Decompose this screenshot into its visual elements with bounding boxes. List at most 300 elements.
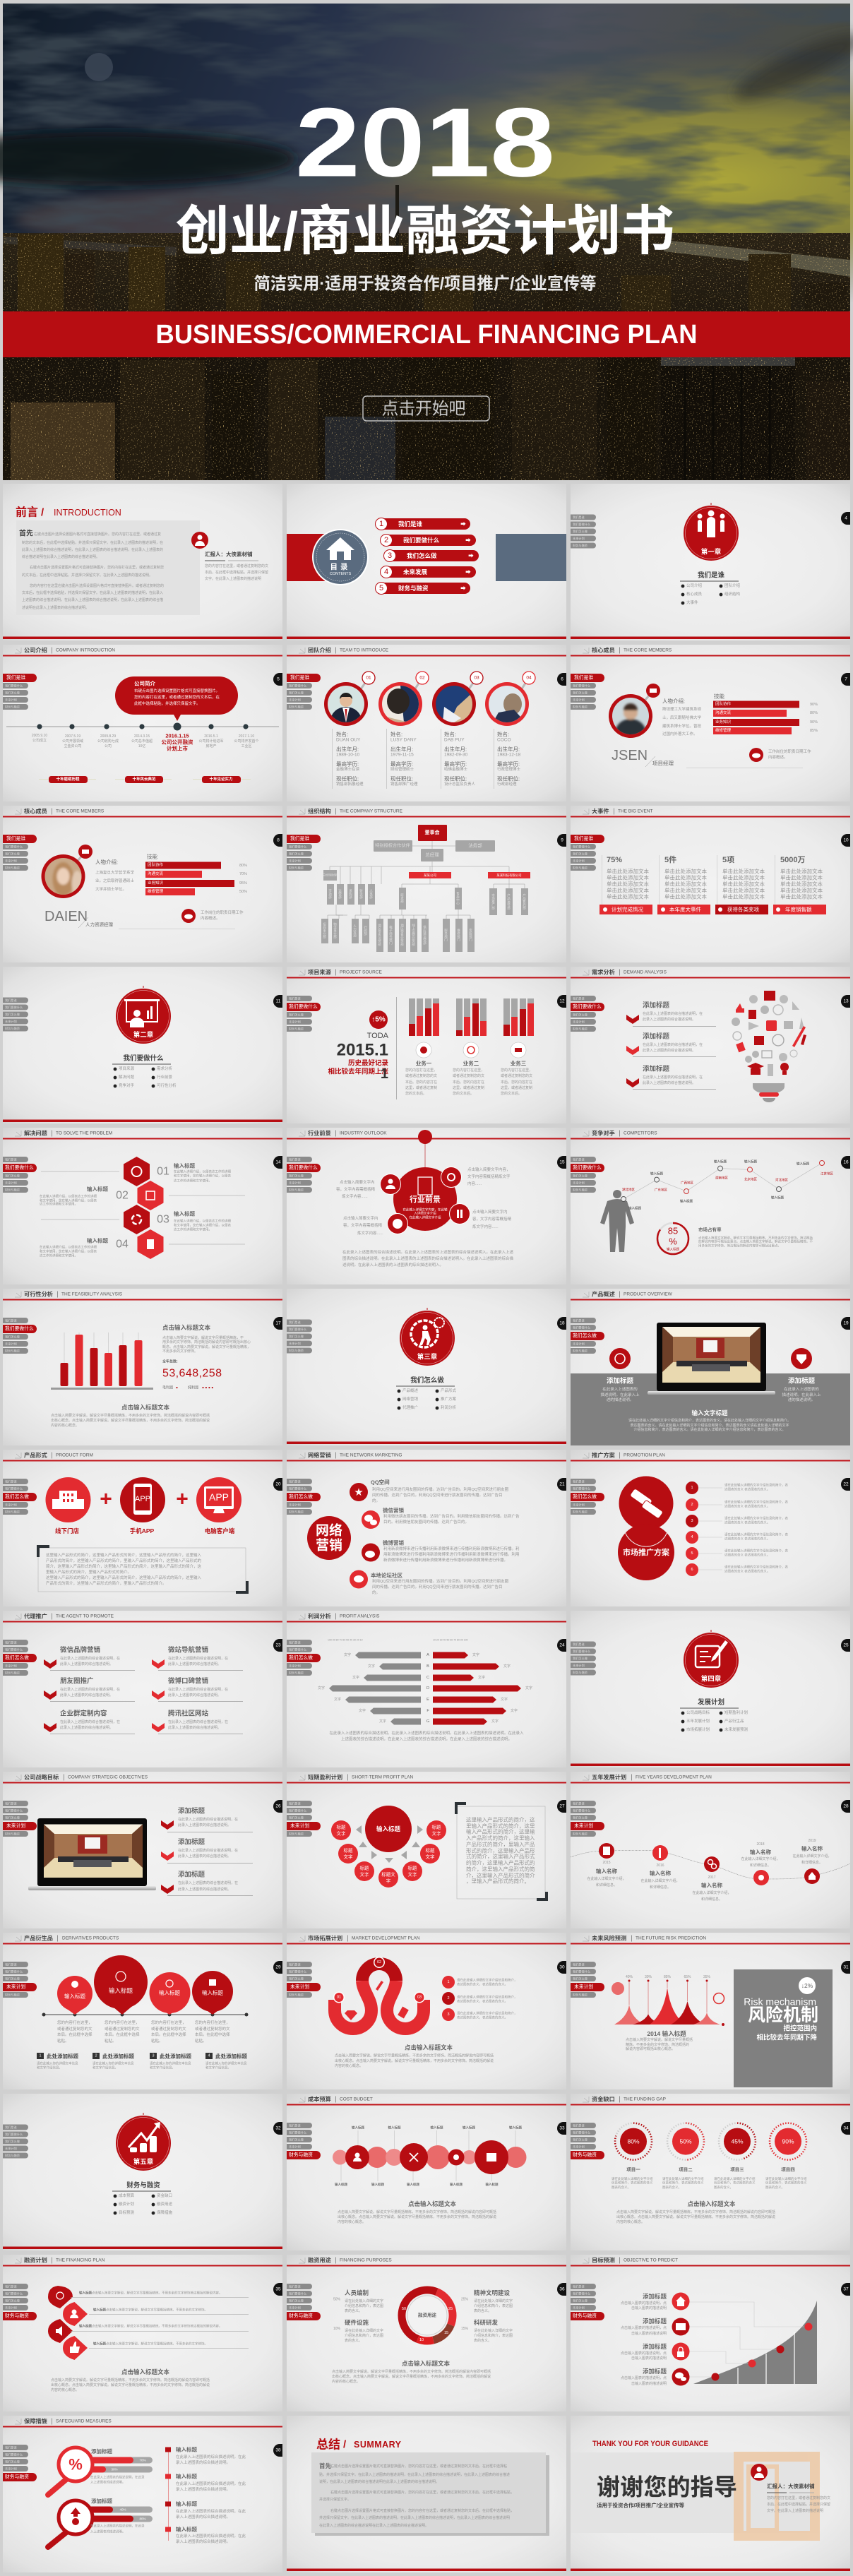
- hexagon step 04: 达工作的详细和文字使用。: [40, 1253, 78, 1258]
- slide: cost budget: [281, 2094, 566, 2250]
- profile column 01: 金融博士在读: [336, 766, 360, 772]
- sidebar: [565, 674, 604, 710]
- header: THE CORE MEMBERS: [624, 648, 672, 652]
- chart summary: 用多余的文字修饰。简洁概括的解说内容即可概括出核心: [162, 1340, 251, 1344]
- numbered list: 1: [691, 1486, 693, 1490]
- chapter title and items: 融资计划: [119, 2201, 134, 2207]
- diverging bar chart: 文字: [511, 1708, 518, 1713]
- chapter badge: [400, 1308, 455, 1366]
- numbered notes: 表达图表的含义，表达图表的含义。: [457, 1998, 508, 2004]
- portrait 03: [432, 672, 483, 726]
- portrait 04: 04: [526, 675, 532, 681]
- chapter badge: 第一章: [701, 548, 722, 556]
- QQ zone: 的。: [372, 1498, 380, 1503]
- header: FIVE YEARS DEVELOPMENT PLAN: [636, 1775, 712, 1779]
- callout texts: 内容......: [467, 1181, 482, 1186]
- slide: product form: [0, 1450, 282, 1606]
- timeline: 公司: [105, 744, 112, 749]
- product texts: 粘贴。: [57, 2038, 69, 2044]
- chapter title and items: 解决问题: [119, 1074, 135, 1080]
- header: [3, 808, 282, 818]
- header: 项目来源: [308, 969, 332, 976]
- header: TO SOLVE THE PROBLEM: [56, 1131, 112, 1135]
- diverging bar chart: 文字: [472, 1652, 479, 1657]
- sidebar: 未来计划: [289, 698, 301, 702]
- slide: five-year plan: [565, 1772, 850, 1928]
- profile column 04: 1983-12-18: [497, 753, 521, 757]
- item: friends circle: 此录入上述图表的综合描述说明。: [60, 1693, 113, 1698]
- chapter badge: [116, 986, 171, 1044]
- sidebar: [565, 1318, 604, 1354]
- contents list: ➡: [460, 585, 466, 592]
- gauge 80%: 请在此处输入详细的文字介绍: [612, 2176, 653, 2181]
- desktop client: [196, 1477, 241, 1534]
- peak chart: 35%: [703, 1975, 711, 1979]
- milestone buttons: [39, 776, 251, 783]
- header: [3, 1774, 282, 1784]
- event column 1: [600, 855, 652, 914]
- item: enterprise group: 企业群定制内容: [60, 1709, 107, 1717]
- reporter block: [751, 2464, 830, 2513]
- bracket text box: 入产品形式的简介，这里输入: [466, 1835, 535, 1842]
- sidebar: 我们怎么做: [573, 2137, 588, 2142]
- page number: 28: [843, 1803, 849, 1809]
- numbered subheads: 请在此输入你的详细文本信息: [150, 2061, 191, 2066]
- profile column 03: 最高学历:: [444, 760, 467, 767]
- measures list: 输入标题: [176, 2525, 197, 2532]
- market line: 湖南地区: [715, 1175, 728, 1181]
- left legend: 表的含义。: [345, 2338, 362, 2343]
- timeline: 公司成立: [32, 738, 47, 743]
- text panel: foreword: 此录入上述图表的综合描述说明，在此录入上述图表的综合描述说明，在此录入上述图表的: [22, 547, 163, 552]
- page number: 35: [275, 2286, 281, 2292]
- page number: [557, 673, 566, 686]
- sidebar: 财务与融资: [573, 1349, 587, 1353]
- sidebar: 我们怎么做: [573, 1656, 588, 1661]
- hero start button: [363, 396, 489, 421]
- central circle with satellites: 入详细文字介绍: [414, 1210, 436, 1216]
- chapter title and items: 我们要做什么: [123, 1054, 164, 1062]
- description: [51, 2368, 210, 2392]
- org chart: 服务部门: [444, 929, 448, 942]
- sidebar: 我们怎么做: [289, 1815, 304, 1820]
- profile column 02: 财经管理硕士: [390, 766, 414, 772]
- magnifier 1 with bars: 添加标题: [91, 2447, 112, 2455]
- business three: 您的内容打在这里，: [501, 1068, 532, 1073]
- header: THE NETWORK MARKETING: [340, 1453, 402, 1457]
- local forum: 利用QQ空间来进行用友圈间的传播。达到广告目的。利用QQ空间来进行朋友圈: [372, 1578, 509, 1584]
- sidebar: 我们是谁: [573, 1157, 585, 1162]
- description: 在此录入上述图表的综合描述说明。在此录入上述图表的综合描述说明。在此录入上述图表的描述说明。在此录入: [329, 1730, 524, 1736]
- profile column 04: 行政部经理: [497, 781, 517, 787]
- measures list: 录入上述图表的综合描述说明。: [176, 2539, 230, 2544]
- event column 1: 单击此处添加文本: [607, 887, 649, 894]
- sidebar: 财务与融资: [289, 2151, 313, 2158]
- header: 公司介绍: [24, 647, 47, 654]
- slide: financing plan: [0, 2255, 282, 2411]
- event column 2: 单击此处添加文本: [664, 880, 707, 887]
- gauge 45%: 图表的含义。: [714, 2185, 733, 2190]
- target 2: 点击输入图表的描述说明，点: [621, 2325, 667, 2330]
- item: friends circle: [44, 1676, 135, 1702]
- magnifier 1 with bars: 在此录入上述图表的描述说明，在此录: [90, 2474, 145, 2480]
- profile column 04: 出生年月:: [497, 746, 520, 753]
- header: COMPANY INTRODUCTION: [56, 648, 115, 652]
- page number: 19: [843, 1320, 849, 1326]
- hexagon step 01: 01: [157, 1165, 169, 1178]
- chart caption: 精炼。不用多余的文字修饰。简洁概括的: [626, 2042, 689, 2047]
- sidebar: 我们怎么做: [289, 2298, 304, 2303]
- product texts: 您的内容打在这里，: [105, 2020, 140, 2025]
- sidebar: 未来计划: [6, 1983, 25, 1990]
- sidebar: 我们是谁: [573, 2284, 585, 2289]
- product description box: 里输入产品形式的简介，里输入产品形式的简介。: [46, 1569, 131, 1575]
- record statement: 相比较去年同期上涨: [328, 1068, 388, 1076]
- magnifier 1 with bars: %: [68, 2456, 83, 2473]
- org chart: 产品运营部: [507, 893, 511, 911]
- plan item 2: 点击输入简要文字解说。解说文字尽量概括精炼。不用多余的文字修饰。: [106, 2308, 208, 2312]
- diverging bar chart: 文字: [501, 1697, 508, 1702]
- plan item 4: [63, 2336, 249, 2360]
- page number: [273, 1800, 282, 1813]
- target 4: 添加标题: [643, 2368, 667, 2375]
- bar chart group 2: [456, 998, 487, 1036]
- knot diagram: [335, 1964, 424, 2029]
- timeline: 公司将开发首个: [234, 739, 259, 744]
- thanks headline: 谢谢您的指导: [597, 2474, 737, 2500]
- page number: [557, 1639, 566, 1652]
- event column 4: 单击此处添加文本: [780, 887, 823, 894]
- description: 图表的综合描述说明。在此录入上述图表的上述图表的综合描述说明入。在此录入上述图表的综合描: [342, 1256, 514, 1261]
- item: WeChat guide: 微站导航营销: [168, 1645, 209, 1654]
- donut chart: 融资用途: [418, 2312, 436, 2318]
- radial diagram: 输入标题: [376, 1825, 400, 1832]
- event column 2: 单击此处添加文本: [664, 887, 707, 894]
- sidebar: 我们是谁: [290, 835, 309, 842]
- event column 4: 5000万: [780, 855, 805, 864]
- org chart: 地区零售业务部: [400, 923, 404, 947]
- sidebar: 我们是谁: [5, 2284, 17, 2289]
- reporter block: 文字。在此录入上述图表的描述说明: [205, 576, 261, 581]
- profile column 04: 姓名:: [497, 730, 509, 737]
- sidebar: 我们怎么做: [5, 2139, 20, 2144]
- chart summary: 纯利润: [188, 1385, 198, 1390]
- callout texts: [336, 1167, 512, 1236]
- text panel: foreword: 上述图表的综合描述说明，在此录入上述图表的综合描述说明，在此录入上述图表的综合描: [22, 597, 163, 602]
- gauge 45%: 45%: [731, 2138, 744, 2145]
- milestone buttons: 十年磨砺历程: [56, 776, 80, 782]
- slide: solving the problem: [0, 1128, 282, 1284]
- header: THE FINANCING PLAN: [56, 2258, 105, 2262]
- slide: summary: [287, 2416, 566, 2572]
- description: 点击输入标题文本: [687, 2200, 736, 2207]
- sidebar: 未来计划: [5, 1181, 17, 1185]
- radial diagram: 标题: [343, 1847, 353, 1853]
- sidebar: [0, 1640, 37, 1676]
- left feature: 描述说明。在此录入上: [600, 1392, 640, 1397]
- bracket text box: 的简介，这里输入产品形式的: [466, 1859, 535, 1866]
- timeline: 公司开展领域: [62, 739, 83, 744]
- numbered list: 6: [691, 1568, 693, 1572]
- sidebar: 财务与融资: [289, 705, 304, 709]
- product texts: 或者通过复制您的文: [105, 2026, 140, 2032]
- item: WeChat brand: 在此录入上述图表的综合描述说明，在: [60, 1656, 120, 1661]
- sidebar: 我们要做什么: [289, 845, 306, 849]
- sidebar: 未来计划: [6, 1822, 25, 1829]
- profile column 02: [387, 729, 418, 789]
- chapter badge: [684, 503, 739, 561]
- sidebar: 财务与融资: [289, 2312, 313, 2319]
- org chart: 线上运营业务部: [412, 923, 415, 947]
- sidebar: [281, 1801, 321, 1837]
- sidebar: 未来计划: [289, 859, 301, 863]
- item: enterprise group: 在此录入上述图表的综合描述说明，在: [60, 1719, 120, 1724]
- radial diagram: 文字: [336, 1830, 346, 1836]
- profile column 04: 最高学历:: [497, 760, 520, 767]
- timeline: 公司公开融资: [161, 739, 193, 746]
- numbered list: 请在此处输入详细的文字介绍信息和简介，表: [724, 1500, 788, 1504]
- milestone 2015: 和详细信息。: [596, 1883, 617, 1888]
- item: Tencent community: 腾讯社区网站: [168, 1709, 209, 1717]
- header: 推广方案: [592, 1452, 616, 1459]
- description: 内容的核心概念。: [51, 2387, 79, 2392]
- chapter title and items: 大事件: [686, 600, 698, 605]
- chart summary: 点击输入简要文字解说。解说文字尽量概括精炼，不: [162, 1335, 244, 1340]
- header: [571, 1130, 850, 1140]
- profile column 01: DUAN OUY: [336, 737, 361, 743]
- sidebar: 财务与融资: [573, 705, 587, 709]
- diverging bar chart: 文字: [379, 1719, 386, 1724]
- numbered list: 达图表的含义 表达图表的含义。: [724, 1520, 770, 1525]
- description: 点击输入简要文字解说。解说文字尽量概括精炼，不用多余的文字修饰。简洁概括的解说内容即可概括: [51, 2378, 210, 2383]
- gauge 85%: 输入标题: [667, 1247, 679, 1251]
- page number: 23: [275, 1642, 281, 1648]
- hexagon step 02: 达工作的详细和文字使用。: [40, 1202, 78, 1206]
- sidebar: 我们是谁: [5, 2445, 17, 2450]
- numbered list: 3: [691, 1519, 693, 1523]
- sidebar: 我们怎么做: [573, 1332, 597, 1339]
- slide: chapter five: [0, 2094, 282, 2250]
- magnifier 2 with bars: [48, 2497, 153, 2547]
- gauge 85%: %: [669, 1236, 677, 1247]
- page number: [557, 995, 566, 1008]
- milestone 2017: 和详细信息。: [701, 1897, 722, 1902]
- header: [287, 1774, 566, 1784]
- sidebar: 财务与融资: [289, 1510, 304, 1514]
- header: [571, 2096, 850, 2106]
- description: 述说明。在此录入上述图表的上述图表的综合描述说明入。: [342, 1262, 443, 1268]
- numbered list: 达图表的含义 表达图表的含义。: [724, 1504, 770, 1508]
- skill bars: 95%: [239, 881, 247, 886]
- page number: 37: [843, 2286, 849, 2292]
- portrait 04: [485, 672, 535, 726]
- milestone 2017: 2017: [708, 1876, 716, 1880]
- description: [342, 1249, 514, 1268]
- callout bubble: 右键点击图片选择设置图片格式可直接替换图片。: [134, 688, 220, 693]
- hexagon step 01: 达工作的详细和文字使用。: [174, 1178, 212, 1183]
- cloud note: 工作岗位的职责日期工作: [201, 910, 244, 915]
- slide: promotion plan: [565, 1450, 850, 1606]
- diverging bar chart: 文字: [368, 1664, 375, 1669]
- profile column 02: 1979-11-15: [390, 753, 414, 757]
- numbered notes: 1: [447, 1980, 450, 1984]
- slide: chapter one: [565, 484, 850, 640]
- event column 3: 单击此处添加文本: [722, 867, 765, 874]
- profile column 02: LUSY DANY: [390, 737, 417, 743]
- header: [571, 969, 850, 979]
- left legend: 请在此处输入详细的文字: [345, 2328, 383, 2333]
- header: 大事件: [592, 808, 609, 815]
- bubble chain: [333, 2130, 527, 2181]
- milestone 2017: 输入名称: [701, 1881, 722, 1888]
- mobile app: 手机APP: [130, 1527, 155, 1534]
- bio text: 过国内外著大工作。: [662, 731, 698, 737]
- sidebar: [0, 2284, 37, 2320]
- profile column 02: 最高学历:: [390, 760, 413, 767]
- radial diagram: 标题: [432, 1823, 441, 1830]
- numbered notes: 请在此处输入详细的文字介绍信息和简介，: [457, 2011, 517, 2015]
- business one: 或者通过复制您的文: [405, 1073, 437, 1078]
- item: friends circle: 在此录入上述图表的综合描述说明，在: [60, 1687, 120, 1692]
- sidebar: 财务与融资: [573, 1993, 587, 1997]
- org chart: 某某科技有限公司: [496, 873, 522, 878]
- text panel: foreword: 右键点击图片选择设置图片格式可直接替换图片。您的内容打在这里，或者通过复: [34, 532, 161, 537]
- plan item 2: 输入标题: [93, 2308, 106, 2312]
- target 1: 点击输入图表的描述说明，点: [621, 2301, 667, 2306]
- bracket text box: [455, 1802, 548, 1901]
- item: word of mouth: 微博口碑营销: [168, 1676, 209, 1685]
- objective 3: 在此录入上述图表的综合描述说明，在: [178, 1880, 238, 1885]
- reporter block: 您的内容打在这里，或者通过复制您的文: [205, 564, 268, 568]
- org chart: 维修部门: [457, 928, 460, 942]
- page number: [557, 1478, 566, 1491]
- page number: [273, 995, 282, 1008]
- QQ zone: ★: [354, 1487, 363, 1497]
- donut chart: [394, 2282, 460, 2349]
- sidebar: [0, 1962, 37, 1998]
- page number: 24: [559, 1642, 565, 1648]
- sidebar: [565, 2123, 604, 2159]
- chapter title and items: 行业前景: [157, 1074, 173, 1080]
- chart caption: [626, 2030, 693, 2051]
- hero banner: city skyline at dusk: [0, 4, 853, 480]
- numbered notes: 请在此处输入详细的文字介绍信息和简介，: [457, 1977, 517, 1983]
- event column 2: [657, 854, 710, 914]
- radial diagram: 文字: [408, 1871, 417, 1877]
- gauge 90%: 项目四: [781, 2166, 795, 2172]
- market line: 河北地区: [775, 1178, 788, 1182]
- sidebar: 我们怎么做: [5, 1174, 20, 1178]
- slide: big events: [565, 806, 850, 962]
- numbered subheads: 请在此输入你的详细文本信息: [205, 2061, 247, 2066]
- business three: 您的文本后。: [501, 1091, 522, 1096]
- sidebar: 财务与融资: [573, 2312, 597, 2319]
- sidebar: 我们怎么做: [5, 1976, 20, 1981]
- peak chart: [612, 1975, 724, 2026]
- item: friends circle: 朋友圈推广: [60, 1676, 94, 1685]
- chapter title and items: 利润分析: [441, 1405, 457, 1410]
- knot badges: 02: [377, 1960, 381, 1964]
- bar chart: [51, 1332, 153, 1390]
- milestone 2015: 输入名称: [596, 1867, 617, 1874]
- mobile app: [120, 1477, 165, 1534]
- diverging bar chart: [318, 1652, 532, 1724]
- numbered notes: 2: [447, 1996, 450, 2000]
- portrait JSEN: [609, 684, 660, 747]
- page number: [557, 1156, 566, 1169]
- event column 2: 单击此处添加文本: [664, 893, 707, 900]
- sidebar: 我们是谁: [6, 674, 25, 681]
- header: INDUSTRY OUTLOOK: [340, 1131, 387, 1135]
- hexagon step 02: 在此输入详细介绍，以便表达工作的详细: [40, 1193, 97, 1199]
- diverging bar chart: 文字: [344, 1652, 351, 1657]
- page number: 10: [843, 837, 849, 843]
- bracket text box: ，里输入产品形式的简介。: [466, 1877, 530, 1884]
- hexagon step 03: 在此输入详细介绍，以便表达工作的详细: [174, 1219, 231, 1223]
- skill bars: 团队协作: [715, 700, 732, 706]
- plan item 1: 点击输入简要文字解说。解说文字尽量概括精炼。不用多余的文字修饰简洁概括的解说内容。: [92, 2291, 222, 2295]
- record statement: 2015.1: [337, 1041, 388, 1059]
- sidebar: 未来计划: [573, 1663, 585, 1668]
- left legend: 介绍信息和简介，表达图: [345, 2303, 383, 2308]
- slide: safeguard measures: [0, 2416, 282, 2572]
- org chart: 售后中心: [456, 891, 460, 905]
- header: 团队介绍: [308, 647, 331, 654]
- magnifier 1 with bars: 30%: [111, 2467, 118, 2471]
- name and role: DAIEN: [44, 909, 88, 924]
- sidebar: 我们怎么做: [5, 2298, 20, 2303]
- numbered subheads: [37, 2052, 247, 2070]
- skill bars: 业务知识: [715, 719, 732, 724]
- diverging bar chart: E: [426, 1698, 429, 1702]
- timeline and pins: 输入标题: [159, 1988, 180, 1996]
- sidebar: [565, 1801, 604, 1837]
- reporter block: [191, 532, 268, 581]
- description: 点击输入简要文字解说。解说文字尽量概括精炼，不用多余的文字修饰。简洁概括的解说内容即可概括: [332, 2369, 491, 2374]
- numbered notes: 请在此处输入详细的文字介绍信息和简介，: [457, 1994, 517, 2000]
- slide: financing purposes: [281, 2255, 566, 2411]
- business one: 业务一: [416, 1059, 432, 1066]
- page number: 33: [559, 2125, 565, 2131]
- bubble labels: 输入标题: [450, 2182, 463, 2187]
- item: WeChat brand: [44, 1645, 135, 1671]
- sidebar: 财务与融资: [5, 1993, 20, 1997]
- market share text: 的解说内容即可概括出重点。点击输入简要文字解说。解说文字尽量概括精炼。不: [698, 1239, 813, 1244]
- sidebar: 我们是谁: [573, 1318, 585, 1323]
- record statement: [328, 997, 397, 1099]
- chapter title and items: 竞争对手: [119, 1083, 135, 1088]
- business one: 您的内容打在这里，: [405, 1068, 437, 1073]
- sidebar: 我们要做什么: [573, 2291, 590, 2296]
- bio text: 业。之后取得普通硕士: [95, 878, 135, 883]
- hero red band with English title: [3, 311, 850, 357]
- sidebar: 未来计划: [289, 1341, 301, 1346]
- demand item 3: 在此录入上述图表的综合描述说明，在: [643, 1075, 703, 1080]
- grey band: [571, 1373, 850, 1445]
- growth curve: [689, 2301, 817, 2384]
- callout texts: 点击输入简要文字内: [343, 1215, 378, 1221]
- sidebar: 财务与融资: [289, 1671, 304, 1675]
- gauge 90%: 90%: [782, 2138, 794, 2145]
- portrait 01: 01: [366, 675, 371, 681]
- sidebar: [0, 1801, 37, 1837]
- portrait DAIEN: [41, 845, 93, 898]
- WeChat marketing: 目的。利用微信朋友圈间的传播。达到广告目的。: [383, 1519, 469, 1525]
- sidebar: 我们怎么做: [5, 852, 20, 856]
- header: PROFIT ANALYSIS: [340, 1614, 380, 1618]
- profile column 02: 出生年月:: [390, 746, 413, 753]
- item: word of mouth: 在此录入上述图表的综合描述说明，在: [168, 1687, 228, 1692]
